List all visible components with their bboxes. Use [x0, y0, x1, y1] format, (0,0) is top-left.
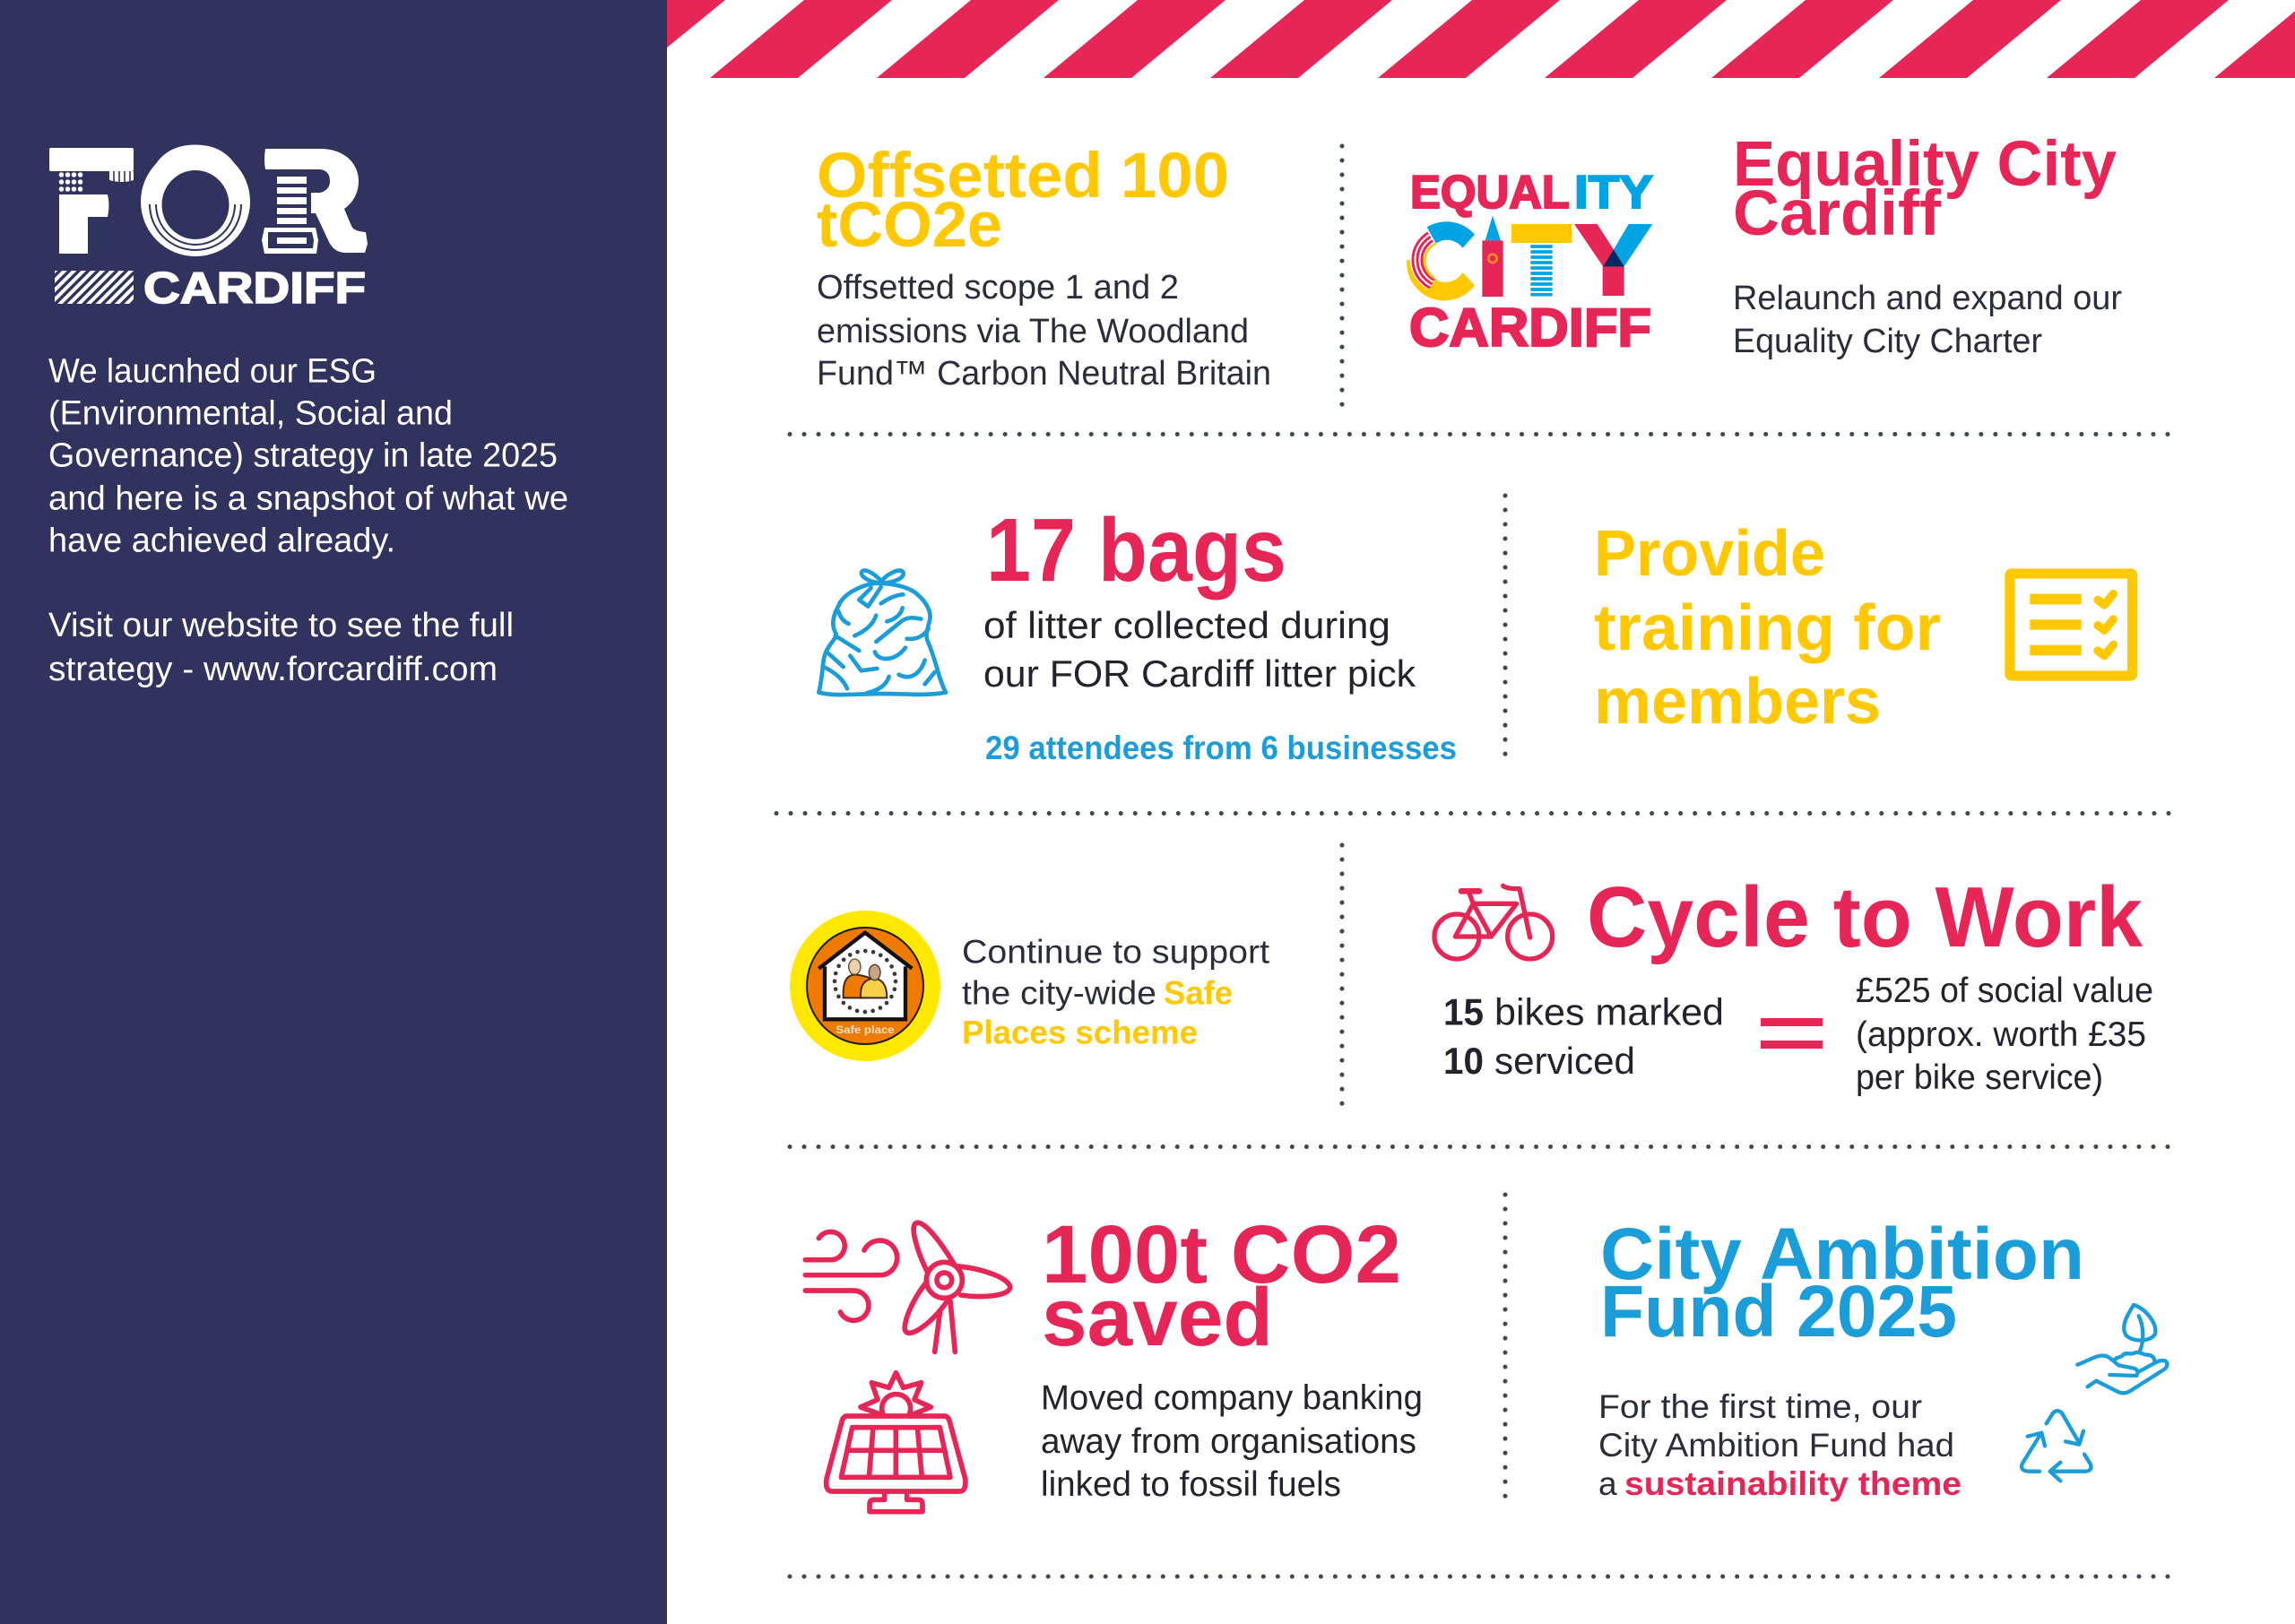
icon: wind and turbine — [805, 1222, 1010, 1352]
text: safe places scheme: Safe — [1164, 975, 1233, 1011]
heading: Offsetted 100 tCO2e — [817, 141, 1229, 261]
heading: Offsetted 100 tCO2e: tCO2e — [817, 190, 1002, 261]
text: charter description: Relaunch and expand our — [1733, 280, 2122, 317]
icon: hand holding seedling — [2077, 1305, 2167, 1393]
block: offsetted carbon — [817, 141, 1271, 393]
heading: Provide training for members: members — [1594, 666, 1881, 738]
block: cycle to work — [1443, 869, 2153, 1097]
heading: Offsetted 100 tCO2e: Offsetted 100 — [817, 141, 1229, 212]
text: intro paragraph: (Environmental, Social and — [48, 394, 453, 432]
heading: Provide training for members: Provide — [1594, 518, 1825, 590]
icon: solar panel — [827, 1373, 966, 1512]
text: offset description: Fund™ Carbon Neutral Britain — [817, 355, 1271, 393]
heading: Cycle to Work: Cycle to Work — [1587, 869, 2143, 965]
icon: bicycle — [1434, 885, 1553, 959]
block: 17 bags — [983, 500, 1457, 766]
text: website call to action — [48, 607, 514, 688]
text: social value: per bike service) — [1856, 1058, 2103, 1097]
logo: FOR Cardiff: R — [264, 114, 368, 289]
text: bikes marked and serviced — [1443, 991, 1724, 1082]
text: offset description: emissions via The Woodland — [817, 313, 1249, 350]
text: litter pick description: of litter collected during — [983, 604, 1390, 646]
heading: Equality City Cardiff: Equality City — [1733, 129, 2117, 200]
text: attendees: 29 attendees from 6 businesses — [985, 730, 1457, 766]
logo: FOR Cardiff: O — [141, 112, 250, 287]
block: Equality City Cardiff text — [1733, 129, 2122, 360]
heading: Provide training for members: training for — [1594, 592, 1941, 664]
icon: safe place badge: Safe place — [836, 1024, 895, 1036]
text: ambition fund description: a — [1598, 1465, 1617, 1502]
text: intro paragraph: and here is a snapshot of what we — [48, 480, 568, 518]
text: safe places scheme: the city-wide — [962, 975, 1156, 1011]
text: bikes marked and serviced: 10 — [1443, 1040, 1484, 1082]
text: litter pick description: our FOR Cardiff litter pick — [983, 652, 1416, 695]
text: ambition fund description: sustainability theme — [1624, 1465, 1962, 1502]
text: bikes marked and serviced: serviced — [1494, 1040, 1635, 1082]
heading: City Ambition Fund 2025: City Ambition — [1600, 1214, 2084, 1295]
icon: equals sign — [1761, 1018, 1823, 1049]
heading: 100t CO2 saved — [1042, 1209, 1401, 1363]
text: ambition fund description — [1598, 1388, 1962, 1502]
text: litter pick description — [983, 604, 1416, 695]
text: offset description: Offsetted scope 1 and 2 — [817, 269, 1179, 307]
text: charter description: Equality City Charter — [1733, 323, 2042, 360]
text: website call to action: strategy - www.forcardiff.com — [48, 651, 498, 688]
heading: Equality City Cardiff — [1733, 129, 2117, 249]
panel: navy sidebar — [0, 0, 667, 1624]
text: intro paragraph — [48, 353, 568, 559]
icon: recycling arrows — [2022, 1411, 2091, 1481]
text: safe places scheme: Continue to support — [962, 934, 1270, 970]
text: banking description: away from organisations — [1041, 1422, 1416, 1461]
logo: FOR Cardiff: F — [49, 114, 134, 289]
block: 100t CO2 saved — [1041, 1209, 1423, 1504]
logo: Equality City Cardiff — [1407, 167, 1653, 358]
text: intro paragraph: We laucnhed our ESG — [48, 353, 377, 391]
text: intro paragraph: have achieved already. — [48, 522, 395, 559]
text: social value: (approx. worth £35 — [1856, 1015, 2146, 1054]
heading: City Ambition Fund 2025: Fund 2025 — [1600, 1271, 1957, 1352]
text: offset description — [817, 269, 1271, 393]
hazard stripe band — [667, 0, 2295, 78]
text: banking description — [1041, 1378, 1423, 1504]
logo: FOR Cardiff: CARDIFF — [143, 264, 366, 313]
heading: 100t CO2 saved: 100t CO2 — [1042, 1209, 1401, 1300]
text: social value: £525 of social value — [1856, 972, 2153, 1010]
text: bikes marked and serviced: 15 — [1443, 991, 1484, 1032]
logo: Equality City Cardiff: CARDIFF — [1409, 298, 1651, 358]
text: charter description — [1733, 280, 2122, 360]
dividers — [776, 146, 2169, 1576]
text: website call to action: Visit our website to see the full — [48, 607, 514, 644]
text: safe places scheme — [962, 934, 1270, 1050]
text: ambition fund description: For the first time, our — [1598, 1388, 1922, 1425]
heading: Provide training for members — [1594, 518, 1941, 738]
logo: Equality City Cardiff: EQUAL — [1410, 167, 1570, 219]
logo: Equality City Cardiff: ITY — [1574, 167, 1653, 219]
text: intro paragraph: Governance) strategy in late 2025 — [48, 437, 558, 475]
icon: checklist — [2010, 574, 2133, 676]
logo: FOR Cardiff — [49, 145, 368, 305]
heading: City Ambition Fund 2025 — [1600, 1214, 2084, 1352]
text: bikes marked and serviced: bikes marked — [1494, 991, 1724, 1032]
heading: Equality City Cardiff: Cardiff — [1733, 178, 1941, 249]
text: banking description: Moved company banking — [1041, 1378, 1423, 1418]
text: ambition fund description: City Ambition Fund had — [1598, 1427, 1954, 1464]
heading: 17 bags: 17 bags — [986, 500, 1286, 600]
block: City Ambition Fund — [1598, 1214, 2084, 1502]
text: safe places scheme: Places scheme — [962, 1015, 1198, 1050]
icon: litter bag — [818, 570, 946, 695]
text: banking description: linked to fossil fuels — [1041, 1465, 1341, 1504]
icon: safe place badge — [790, 911, 940, 1061]
text: social value — [1856, 972, 2153, 1097]
heading: 100t CO2 saved: saved — [1042, 1272, 1273, 1363]
